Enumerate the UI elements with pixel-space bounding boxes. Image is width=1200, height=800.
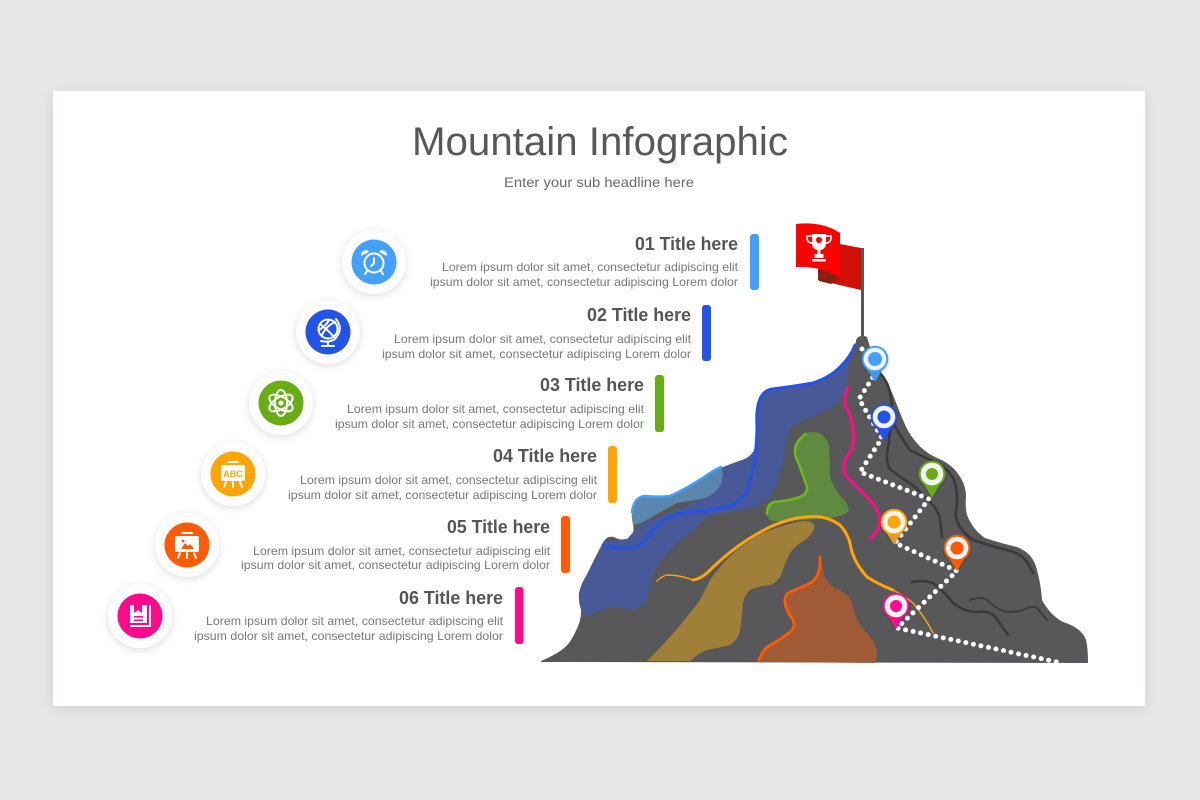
tan area	[647, 521, 814, 661]
heading 03: 03 Title here	[540, 375, 644, 395]
icon: globe	[296, 300, 360, 364]
pin 1	[862, 346, 888, 382]
text 03	[335, 402, 645, 431]
bar 04	[608, 446, 617, 503]
icon: trophy	[807, 234, 831, 262]
icon: ABC board: ABC	[223, 469, 243, 479]
text 01: ipsum dolor sit amet, consectetur adipiscing Lorem dolor	[430, 275, 738, 289]
text 04	[288, 473, 598, 502]
green stroke	[767, 434, 807, 514]
flag pole	[856, 248, 868, 347]
subtitle: Enter your sub headline here	[504, 174, 694, 190]
heading 02: 02 Title here	[587, 305, 691, 325]
brown area	[758, 556, 877, 663]
mountain body	[541, 336, 1088, 663]
dotted route	[859, 349, 1057, 662]
text 04: ipsum dolor sit amet, consectetur adipiscing Lorem dolor	[288, 488, 597, 502]
flag	[796, 223, 868, 347]
text 03: ipsum dolor sit amet, consectetur adipiscing Lorem dolor	[335, 417, 644, 431]
text 05	[241, 544, 551, 572]
bar 02	[702, 305, 711, 361]
text 03: Lorem ipsum dolor sit amet, consectetur adipiscing elit	[347, 402, 645, 416]
pin 2	[871, 404, 897, 441]
bar 03	[655, 375, 664, 432]
item 04	[201, 442, 617, 506]
text 06	[194, 614, 504, 643]
pink river	[844, 387, 880, 539]
orange river	[759, 557, 820, 660]
item 05	[155, 513, 570, 577]
text 06: Lorem ipsum dolor sit amet, consectetur adipiscing elit	[206, 614, 504, 628]
item 02	[296, 300, 711, 364]
light blue stroke	[632, 467, 721, 512]
blue river	[603, 345, 855, 548]
text 02: ipsum dolor sit amet, consectetur adipiscing Lorem dolor	[382, 347, 691, 361]
panel: slide card	[53, 91, 1145, 706]
title: Mountain Infographic	[412, 120, 788, 164]
icon: book	[108, 584, 172, 648]
light blue ridge area	[632, 467, 723, 525]
text 02: Lorem ipsum dolor sit amet, consectetur adipiscing elit	[394, 332, 692, 346]
text 04: Lorem ipsum dolor sit amet, consectetur adipiscing elit	[300, 473, 598, 487]
icon: ABC board	[201, 442, 265, 506]
text 01: Lorem ipsum dolor sit amet, consectetur adipiscing elit	[442, 260, 739, 274]
bar 06	[515, 587, 524, 644]
heading 06: 06 Title here	[399, 588, 503, 608]
heading 01: 01 Title here	[635, 234, 738, 254]
pin 5	[944, 535, 970, 571]
bar 05	[561, 516, 570, 573]
dark creases	[880, 373, 1047, 635]
text 06: ipsum dolor sit amet, consectetur adipiscing Lorem dolor	[194, 629, 503, 643]
icon: picture easel	[155, 513, 219, 577]
mountain illustration	[541, 336, 1088, 663]
bar 01	[750, 234, 759, 290]
yellow river	[657, 517, 933, 633]
text 02	[382, 332, 692, 361]
item 06	[108, 584, 524, 648]
text 01	[430, 260, 739, 289]
text 05: ipsum dolor sit amet, consectetur adipiscing Lorem dolor	[241, 558, 550, 572]
heading 05: 05 Title here	[447, 517, 550, 537]
text 05: Lorem ipsum dolor sit amet, consectetur adipiscing elit	[253, 544, 551, 558]
heading 04: 04 Title here	[493, 446, 597, 466]
blue ridge area	[579, 345, 855, 616]
item 01	[342, 230, 759, 294]
item 03	[249, 371, 664, 435]
icon: alarm clock	[342, 230, 406, 294]
green area	[767, 432, 849, 521]
pin 3	[919, 461, 945, 498]
pin 4	[881, 509, 907, 545]
icon: atom	[249, 371, 313, 435]
pin 6	[883, 593, 909, 629]
